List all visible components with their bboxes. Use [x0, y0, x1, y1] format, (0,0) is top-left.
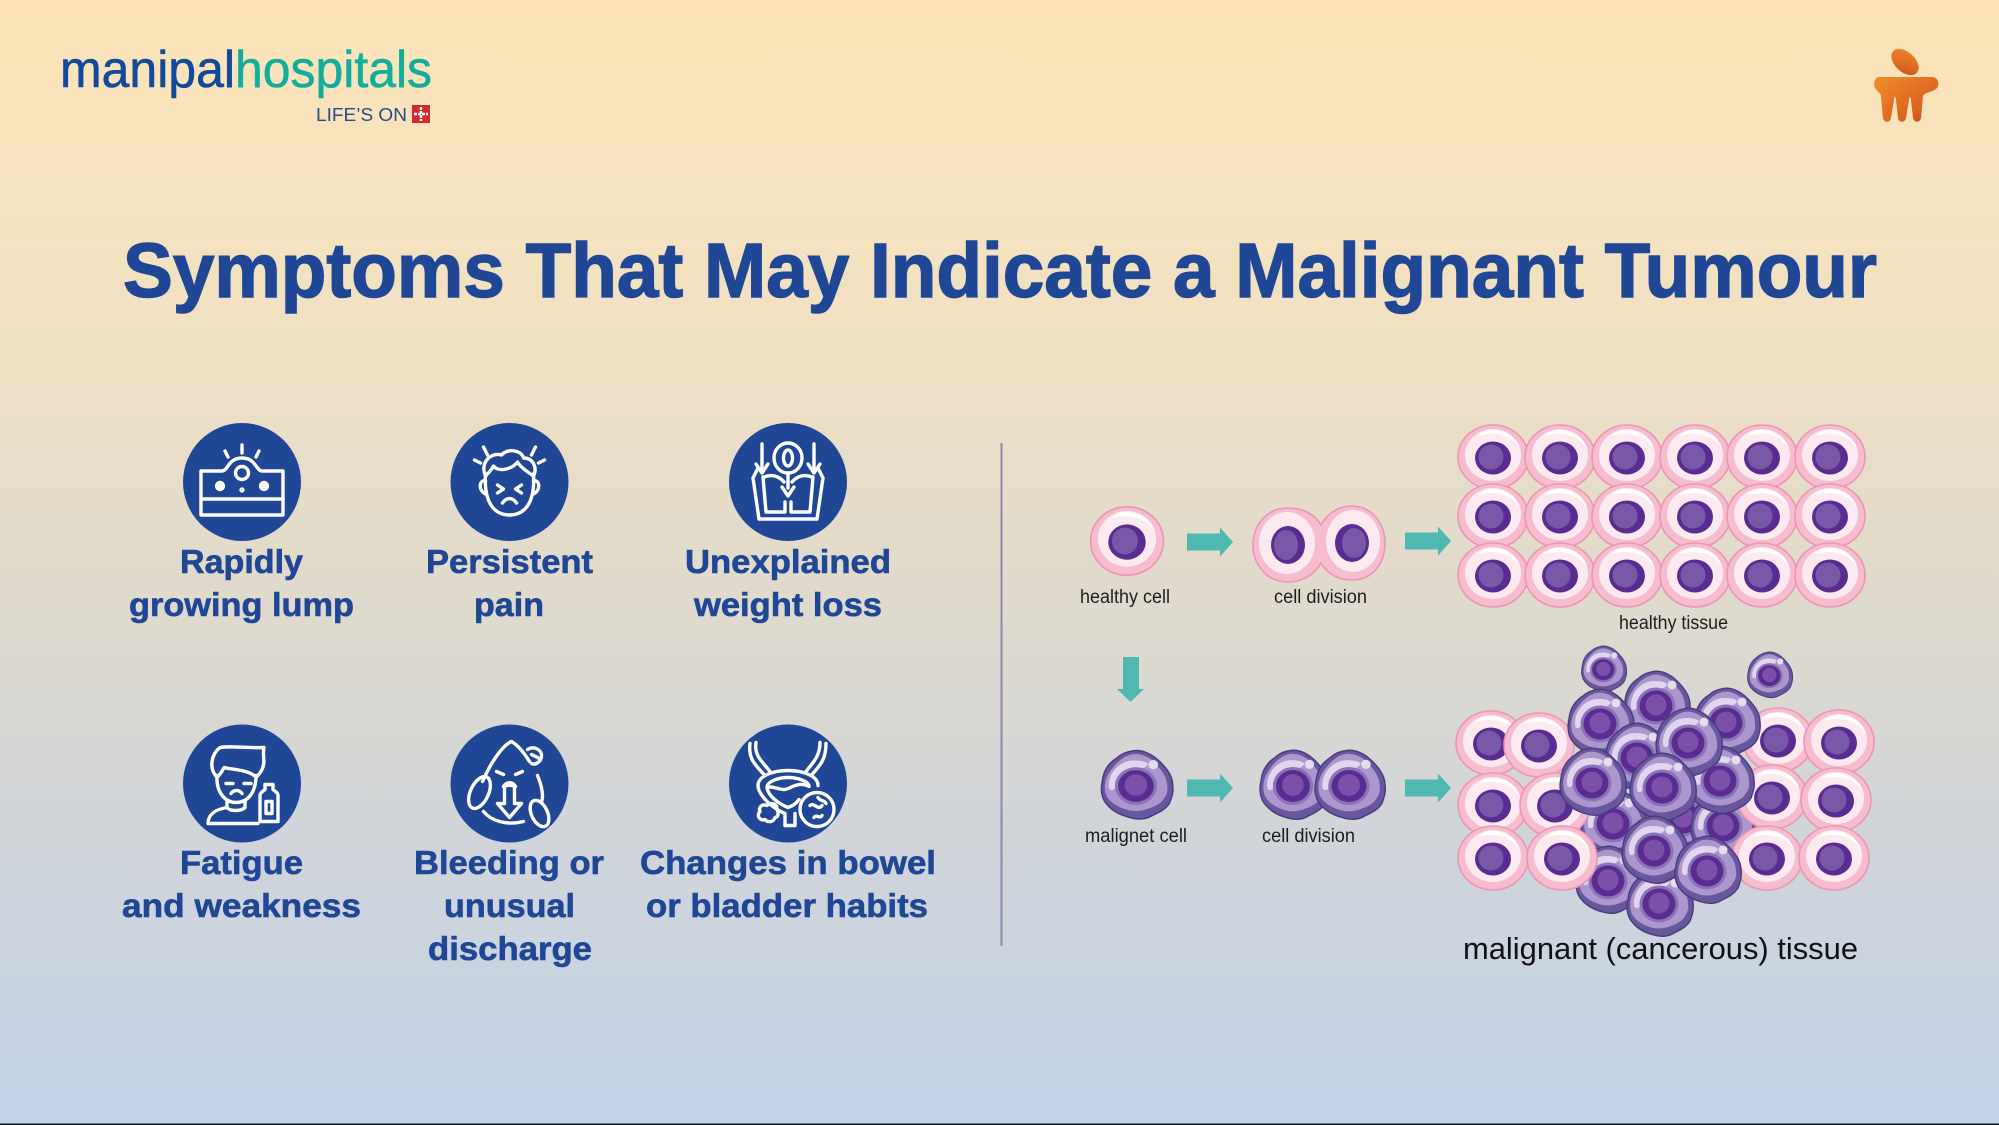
healthy cell: healthy cell [1080, 587, 1170, 608]
symptom: rapidly growing lump [129, 423, 354, 623]
malignant cell division: cell division [1262, 826, 1355, 847]
healthy cell division: cell division [1274, 587, 1367, 608]
arrow: division to malignant tissue [1405, 774, 1451, 802]
logo: manipalhospitals: LIFE’S ON [316, 104, 407, 125]
panel: symptoms [122, 423, 936, 967]
logo: manipalhospitals: hospitals [235, 41, 432, 99]
symptom: fatigue and weakness: Fatigue [180, 844, 303, 881]
symptom: bleeding or unusual discharge: unusual [444, 887, 575, 924]
symptom: unexplained weight loss: Unexplained [685, 543, 891, 580]
symptom: rapidly growing lump: Rapidly [180, 543, 304, 580]
title: Symptoms That May Indicate a Malignant Tumour [123, 228, 1877, 314]
symptom: persistent pain [426, 423, 593, 623]
symptom: changes in bowel or bladder habits: or bladder habits [646, 887, 928, 924]
logo: manipalhospitals: manipal [60, 41, 235, 99]
malignant cell: malignet cell [1085, 826, 1187, 847]
symptom: unexplained weight loss [685, 423, 891, 623]
symptom: rapidly growing lump: growing lump [129, 586, 354, 623]
symptom: bleeding or unusual discharge [414, 724, 604, 967]
logo: orange emblem [1874, 44, 1938, 122]
symptom: fatigue and weakness: and weakness [122, 887, 361, 924]
malignant tissue [1456, 646, 1874, 966]
symptom: changes in bowel or bladder habits [640, 724, 936, 924]
malignant cell [1085, 751, 1187, 847]
symptom: persistent pain: pain [474, 586, 544, 623]
healthy cell division [1253, 506, 1385, 608]
arrow: healthy cell to division [1187, 528, 1233, 556]
symptom: fatigue and weakness [122, 724, 361, 924]
malignant cell division [1260, 750, 1385, 847]
arrow: malignant cell to division [1187, 774, 1233, 802]
symptom: changes in bowel or bladder habits: Changes in bowel [640, 844, 936, 881]
arrow: down to malignant cell [1117, 657, 1144, 702]
arrow: division to healthy tissue [1405, 526, 1451, 556]
malignant tissue: malignant (cancerous) tissue [1463, 931, 1858, 966]
healthy tissue [1458, 425, 1865, 634]
panel: cell diagram [1080, 425, 1874, 966]
symptom: persistent pain: Persistent [426, 543, 593, 580]
logo: manipalhospitals [60, 41, 432, 125]
symptom: unexplained weight loss: weight loss [693, 586, 882, 623]
healthy tissue: healthy tissue [1619, 613, 1728, 634]
healthy cell [1080, 507, 1170, 608]
symptom: bleeding or unusual discharge: discharge [428, 930, 592, 967]
symptom: bleeding or unusual discharge: Bleeding or [414, 844, 604, 881]
